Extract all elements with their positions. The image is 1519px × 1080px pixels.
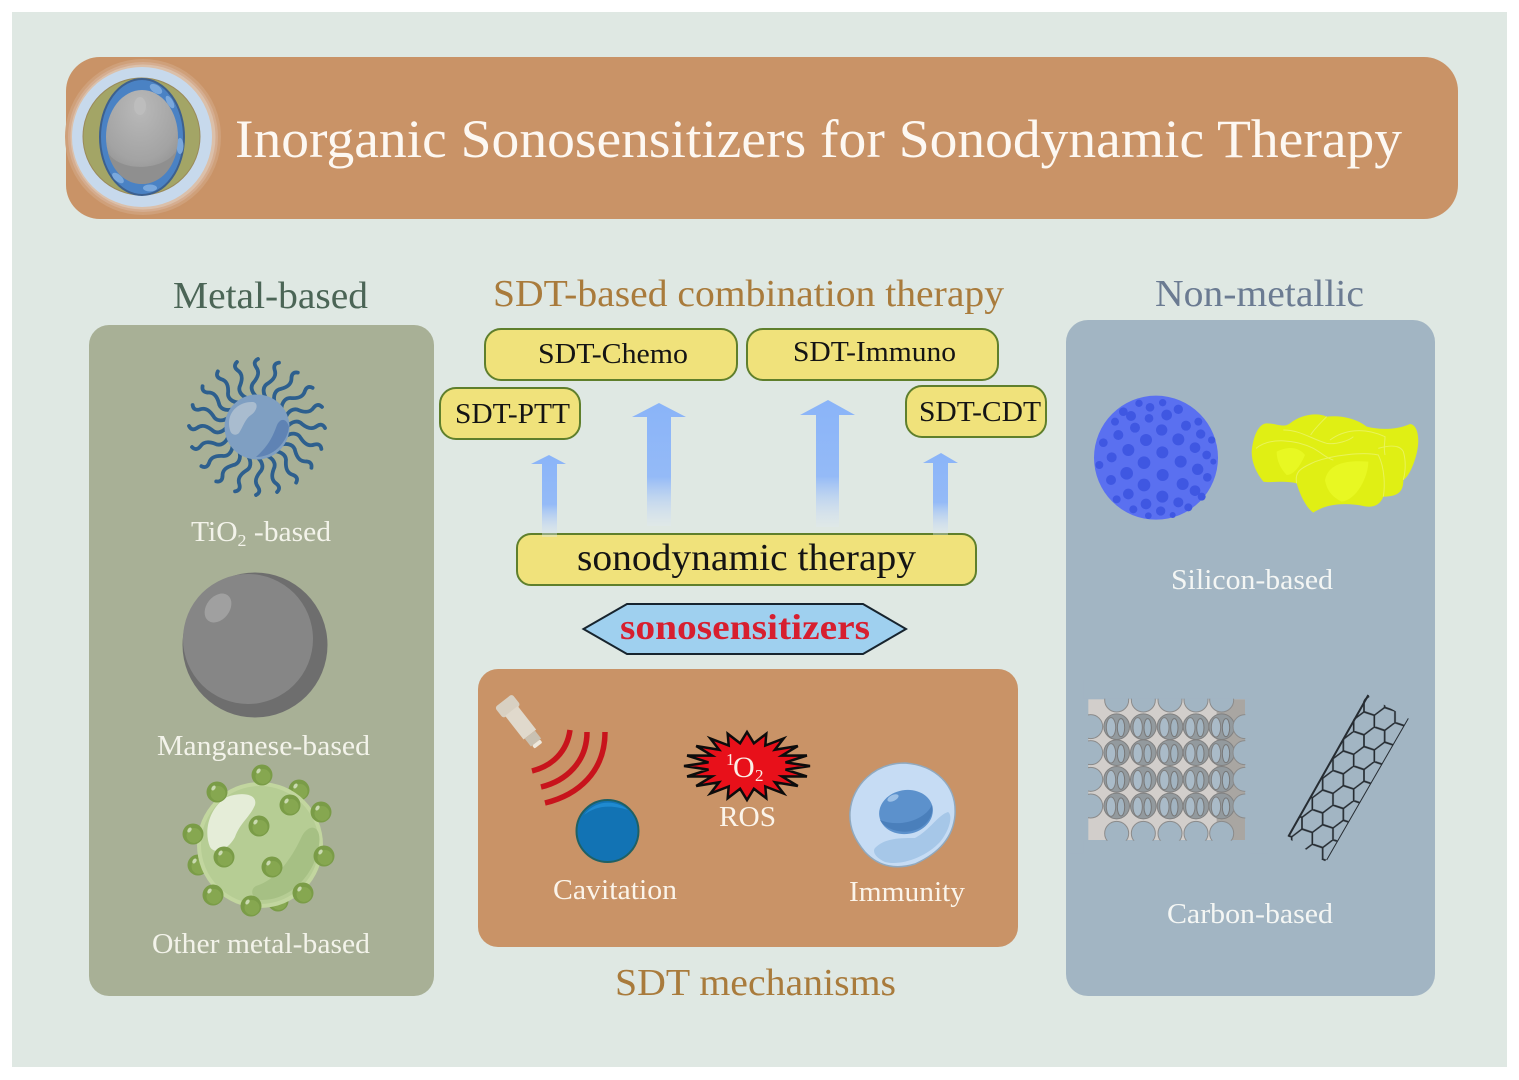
icon: layered nanoparticle: [65, 59, 221, 215]
label: Carbon-based: Carbon-based: [1167, 899, 1333, 930]
header banner: [65, 57, 1458, 219]
panel: metal-based: [89, 325, 434, 996]
hexagon: sonosensitizers: [584, 604, 906, 654]
title: Inorganic Sonosensitizers for Sonodynamic Therapy: [235, 109, 1402, 169]
icon: TiO2 nanoparticle with ligands: [189, 359, 325, 495]
icon: mesoporous silica sphere: [1094, 396, 1218, 520]
label: Manganese-based: Manganese-based: [157, 731, 370, 762]
icon: cavitation bubble: [576, 800, 638, 862]
arrow: to SDT-PTT: [531, 455, 566, 537]
heading: Non-metallic: Non-metallic: [1155, 273, 1364, 315]
box: SDT-Chemo: SDT-Chemo: [538, 338, 688, 370]
panel: non-metallic: [1066, 320, 1435, 996]
panel: SDT mechanisms: [478, 669, 1018, 947]
label: ROS: ROS: [719, 802, 776, 833]
box: SDT-CDT: SDT-CDT: [919, 396, 1041, 428]
hexagon: sonosensitizers: sonosensitizers: [620, 607, 870, 647]
label: Other metal-based: Other metal-based: [152, 929, 370, 960]
box: SDT-CDT: [906, 386, 1046, 437]
icon: porous carbon framework: [1070, 680, 1269, 854]
box: sonodynamic therapy: sonodynamic therapy: [577, 537, 916, 579]
label: TiO2-based: TiO: [191, 517, 235, 548]
arrow: to SDT-Immuno: [800, 400, 855, 527]
icon: ultrasound transducer: [495, 694, 547, 752]
icon: decorated green nanoparticle: [182, 764, 334, 916]
arrow: to SDT-CDT: [923, 453, 958, 535]
box: SDT-Chemo: [485, 329, 737, 380]
icon: ROS burst: [684, 732, 810, 800]
icon: carbon nanotube: [1288, 695, 1408, 862]
label: Cavitation: Cavitation: [553, 875, 677, 906]
label: TiO2-based: 2: [238, 531, 247, 550]
label: Immunity: Immunity: [849, 877, 965, 908]
heading: SDT-based combination therapy: SDT-based combination therapy: [493, 273, 1004, 315]
icon: yellow silicon nanosheets: [1252, 414, 1418, 513]
heading: SDT mechanisms: SDT mechanisms: [615, 962, 896, 1004]
icon: immune cell: [850, 763, 955, 867]
box: SDT-Immuno: [747, 329, 998, 380]
icon: ROS burst: 2: [755, 766, 764, 785]
icon: manganese sphere: [182, 572, 328, 718]
heading: Metal-based: Metal-based: [173, 275, 368, 317]
arrow: to SDT-Chemo: [632, 403, 686, 526]
icon: ultrasound waves: [532, 730, 605, 803]
box: SDT-PTT: [440, 388, 580, 439]
box: SDT-Immuno: SDT-Immuno: [793, 336, 956, 368]
label: TiO2-based: -based: [247, 517, 331, 548]
box: sonodynamic therapy: [517, 534, 976, 585]
icon: ROS burst: 1: [726, 750, 734, 769]
icon: ROS burst: O: [733, 751, 755, 784]
label: Silicon-based: Silicon-based: [1171, 565, 1333, 596]
box: SDT-PTT: SDT-PTT: [455, 398, 570, 430]
